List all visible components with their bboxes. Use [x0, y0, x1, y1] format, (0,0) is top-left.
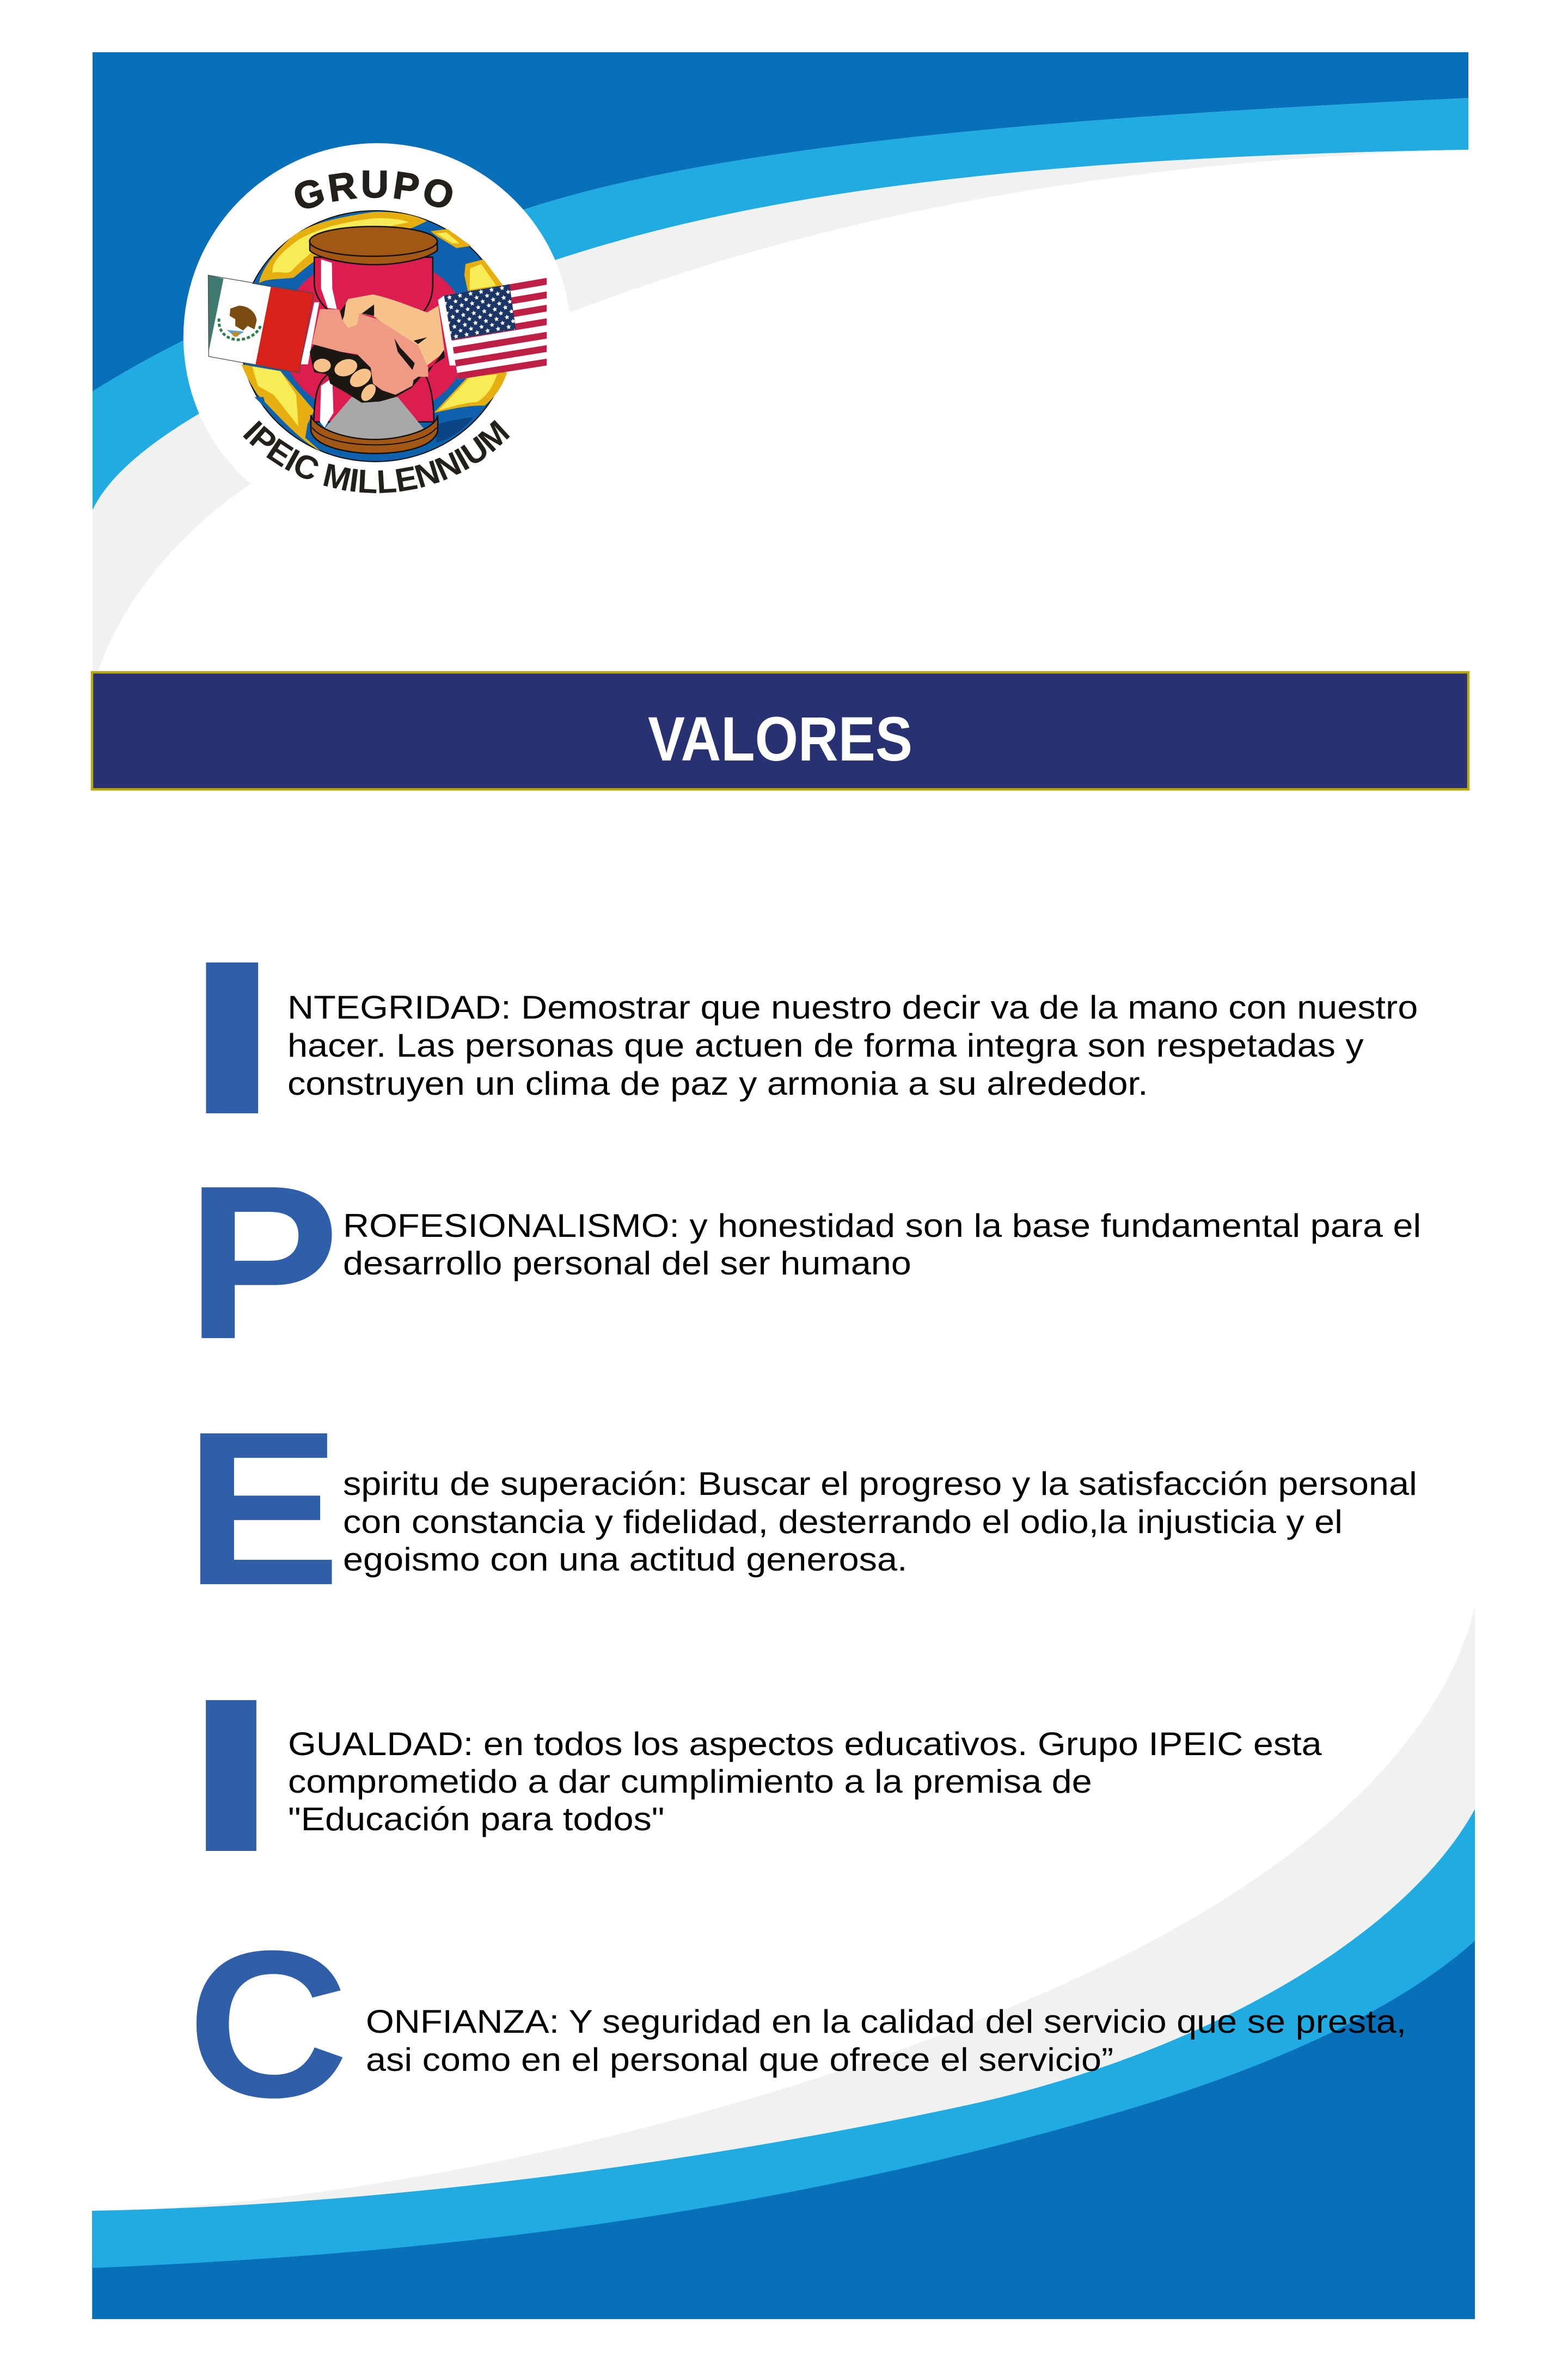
profesionalismo description: ROFESIONALISMO: y honestidad son la base fundamental para el	[343, 1208, 1421, 1244]
big letter C: C	[187, 1908, 349, 2141]
big letter I: I	[182, 1653, 280, 1897]
value: Profesionalismo	[186, 1140, 1421, 1385]
bottom wave decoration	[92, 1606, 1475, 2319]
logo white circle	[183, 143, 571, 531]
logo US flag	[438, 278, 547, 379]
profesionalismo description	[343, 1208, 1421, 1281]
logo globe	[241, 211, 510, 462]
logo: Grupo IPEIC Millennium	[183, 143, 569, 493]
logo Mexican flag	[208, 275, 314, 373]
integridad description	[287, 990, 1418, 1102]
logo text IPEIC MILLENNIUM: IPEIC MILLENNIUM	[243, 420, 510, 493]
espiritu description: spiritu de superación: Buscar el progreso y la satisfacción personal	[343, 1466, 1417, 1502]
igualdad description: GUALDAD: en todos los aspectos educativos. Grupo IPEIC esta	[288, 1726, 1322, 1762]
integridad description: hacer. Las personas que actuen de forma integra son respetadas y	[287, 1028, 1364, 1064]
title banner	[92, 672, 1468, 789]
big letter E: E	[185, 1387, 341, 1631]
igualdad description: comprometido a dar cumplimiento a la premisa de	[288, 1764, 1092, 1800]
espiritu description	[343, 1466, 1417, 1578]
big letter P: P	[186, 1140, 340, 1385]
confianza description	[366, 2004, 1406, 2078]
value: Igualdad	[182, 1653, 1322, 1897]
igualdad description	[288, 1726, 1322, 1837]
confianza description: ONFIANZA: Y seguridad en la calidad del servicio que se presta,	[366, 2004, 1406, 2040]
integridad description: construyen un clima de paz y armonia a su alrededor.	[287, 1066, 1148, 1102]
big letter I: I	[182, 915, 283, 1160]
confianza description: asi como en el personal que ofrece el servicio”	[366, 2042, 1113, 2078]
profesionalismo description: desarrollo personal del ser humano	[343, 1246, 911, 1281]
logo red disc	[280, 254, 470, 418]
logo hourglass	[310, 226, 438, 453]
igualdad description: "Educación para todos"	[288, 1801, 664, 1837]
logo handshake	[301, 295, 445, 404]
logo text GRUPO: GRUPO	[295, 170, 452, 209]
value: Espiritu de superacion	[185, 1387, 1417, 1631]
title text VALORES: VALORES	[648, 704, 912, 774]
espiritu description: con constancia y fidelidad, desterrando el odio,la injusticia y el	[343, 1504, 1343, 1540]
value: Integridad	[182, 915, 1418, 1160]
top wave decoration	[93, 52, 1468, 671]
value: Confianza	[187, 1908, 1406, 2141]
integridad description: NTEGRIDAD: Demostrar que nuestro decir va de la mano con nuestro	[287, 990, 1418, 1026]
espiritu description: egoismo con una actitud generosa.	[343, 1542, 908, 1578]
